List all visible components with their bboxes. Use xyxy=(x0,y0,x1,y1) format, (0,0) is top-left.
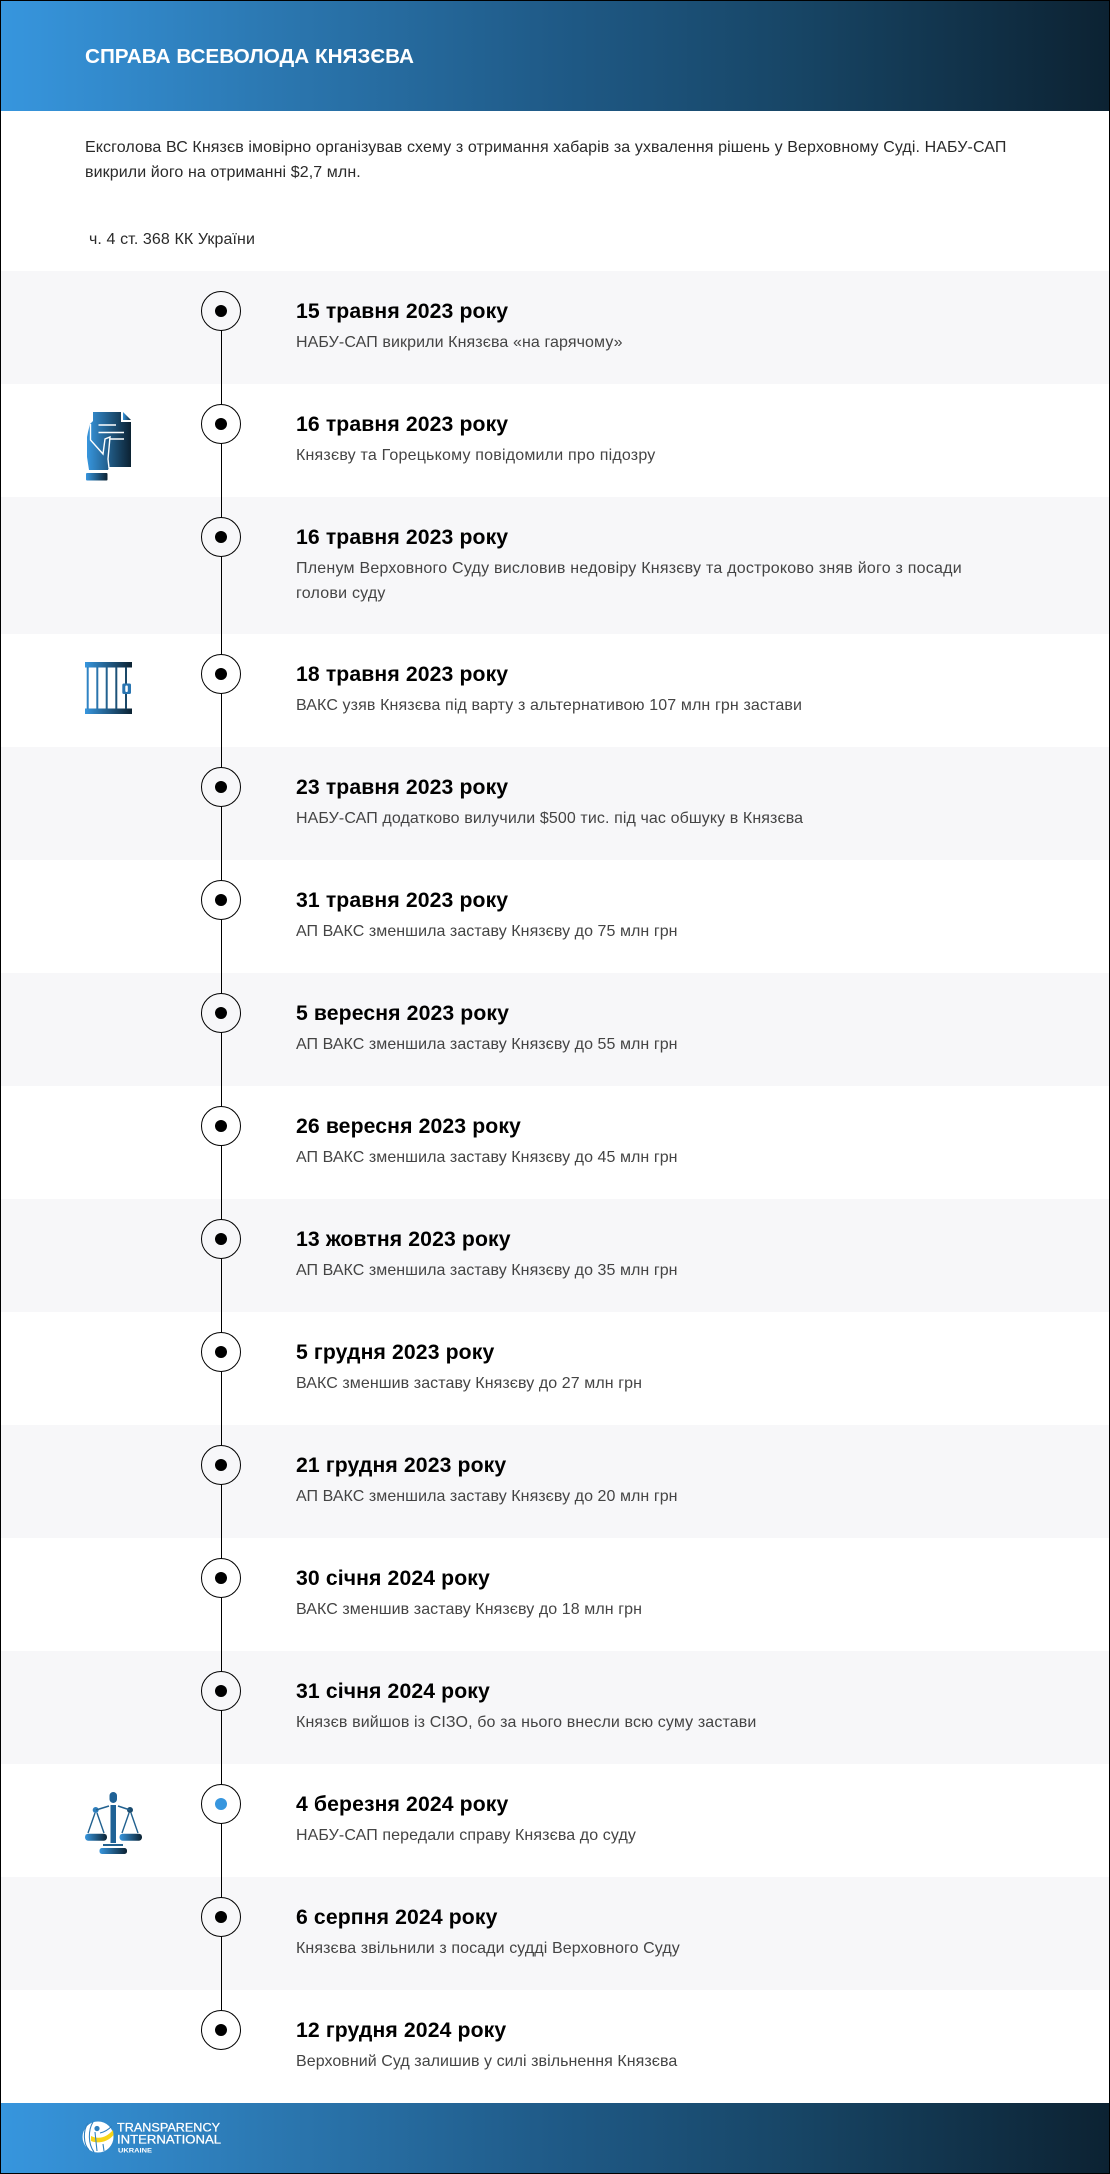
date: 6 серпня 2024 року xyxy=(296,1906,497,1928)
description: Князєва звільнили з посади судді Верховного Суду xyxy=(296,1940,680,1957)
marker xyxy=(201,1897,241,1937)
logo: Transparency International Ukraine: INTERNATIONAL xyxy=(117,2132,221,2146)
footer band xyxy=(0,2103,1110,2174)
date: 15 травня 2023 року xyxy=(296,300,508,322)
event: 21 грудня 2023 xyxy=(0,1425,1110,1538)
description: ВАКС зменшив заставу Князєву до 18 млн грн xyxy=(296,1601,642,1618)
marker xyxy=(201,1671,241,1711)
event: 12 грудня 2024 xyxy=(201,2010,678,2070)
description: АП ВАКС зменшила заставу Князєву до 35 млн грн xyxy=(296,1262,678,1279)
event: 6 серпня 2024 xyxy=(0,1877,1110,1990)
date: 5 вересня 2023 року xyxy=(296,1002,509,1024)
event: 13 жовтня 2023 xyxy=(0,1199,1110,1312)
logo: Transparency International Ukraine: TRANSPARENCY xyxy=(117,2120,220,2134)
date: 13 жовтня 2023 року xyxy=(296,1228,511,1250)
event: 5 грудня 2023 xyxy=(201,1332,642,1392)
description: Пленум Верховного Суду висловив недовіру Князєву та достроково зняв його з посади xyxy=(296,560,962,577)
event: 31 січня 2024 xyxy=(0,1651,1110,1764)
marker xyxy=(201,767,241,807)
marker xyxy=(201,1445,241,1485)
event: 5 вересня 2023 xyxy=(0,973,1110,1086)
description xyxy=(296,560,962,602)
marker xyxy=(201,1558,241,1598)
marker xyxy=(201,654,241,694)
description: АП ВАКС зменшила заставу Князєву до 55 млн грн xyxy=(296,1036,678,1053)
marker xyxy=(201,2010,241,2050)
description: Князєв вийшов із СІЗО, бо за нього внесли всю суму застави xyxy=(296,1714,756,1731)
date: 5 грудня 2023 року xyxy=(296,1340,494,1364)
event: 18 травня 2023 xyxy=(85,654,802,714)
icon: prison bars xyxy=(85,662,132,714)
description: НАБУ-САП передали справу Князєва до суду xyxy=(296,1827,636,1844)
description: голови суду xyxy=(296,584,386,602)
description: ВАКС узяв Князєва під варту з альтернативою 107 млн грн застави xyxy=(296,697,802,714)
event: 16 травня 2023, підозра xyxy=(86,404,656,480)
date: 31 січня 2024 року xyxy=(296,1680,490,1702)
timeline vertical line xyxy=(221,311,222,2026)
date: 30 січня 2024 року xyxy=(296,1566,490,1590)
marker xyxy=(201,1106,241,1146)
description: АП ВАКС зменшила заставу Князєву до 20 млн грн xyxy=(296,1488,678,1505)
event: 15 травня 2023 xyxy=(0,271,1110,384)
marker xyxy=(201,517,241,557)
marker xyxy=(201,993,241,1033)
date: 26 вересня 2023 року xyxy=(296,1114,521,1138)
intro text: викрили його на отриманні $2,7 млн. xyxy=(85,164,361,181)
date: 18 травня 2023 року xyxy=(296,662,508,686)
event: 4 березня 2024 xyxy=(85,1784,636,1854)
date: 23 травня 2023 року xyxy=(296,776,508,798)
icon: hand holding document xyxy=(86,412,131,480)
marker xyxy=(201,404,241,444)
description: АП ВАКС зменшила заставу Князєву до 45 млн грн xyxy=(296,1149,678,1166)
marker xyxy=(201,291,241,331)
marker xyxy=(201,1332,241,1372)
description: АП ВАКС зменшила заставу Князєву до 75 млн грн xyxy=(296,923,678,940)
date: 16 травня 2023 року xyxy=(296,526,508,548)
title: СПРАВА ВСЕВОЛОДА КНЯЗЄВА xyxy=(85,45,414,68)
date: 21 грудня 2023 року xyxy=(296,1454,506,1476)
date: 4 березня 2024 року xyxy=(296,1792,508,1816)
intro text: Ексголова ВС Князєв імовірно організував схему з отримання хабарів за ухвалення рішень у Верховному Суді. НАБУ-САП xyxy=(85,139,1006,156)
event: 26 вересня 2023 xyxy=(201,1106,678,1166)
event: 16 травня 2023, пленум xyxy=(0,497,1110,634)
event: 30 січня 2024 xyxy=(201,1558,642,1618)
event: 31 травня 2023 xyxy=(201,880,678,940)
intro text xyxy=(85,139,1006,181)
description: Верховний Суд залишив у силі звільнення Князєва xyxy=(296,2053,677,2070)
description: Князєву та Горецькому повідомили про підозру xyxy=(296,447,655,464)
marker xyxy=(201,1219,241,1259)
logo: Transparency International Ukraine xyxy=(82,2120,221,2154)
logo: Transparency International Ukraine: UKRAINE xyxy=(118,2148,152,2154)
marker xyxy=(201,1784,241,1824)
description: ВАКС зменшив заставу Князєву до 27 млн грн xyxy=(296,1375,642,1392)
date: 12 грудня 2024 року xyxy=(296,2018,506,2042)
icon: scales of justice xyxy=(85,1792,142,1854)
description: НАБУ-САП викрили Князєва «на гарячому» xyxy=(296,334,623,351)
date: 31 травня 2023 року xyxy=(296,888,508,912)
date: 16 травня 2023 року xyxy=(296,412,508,436)
header band xyxy=(0,0,1110,111)
legal article: ч. 4 ст. 368 КК України xyxy=(89,231,255,248)
marker xyxy=(201,880,241,920)
description: НАБУ-САП додатково вилучили $500 тис. під час обшуку в Князєва xyxy=(296,810,803,827)
event: 23 травня 2023 xyxy=(0,747,1110,860)
